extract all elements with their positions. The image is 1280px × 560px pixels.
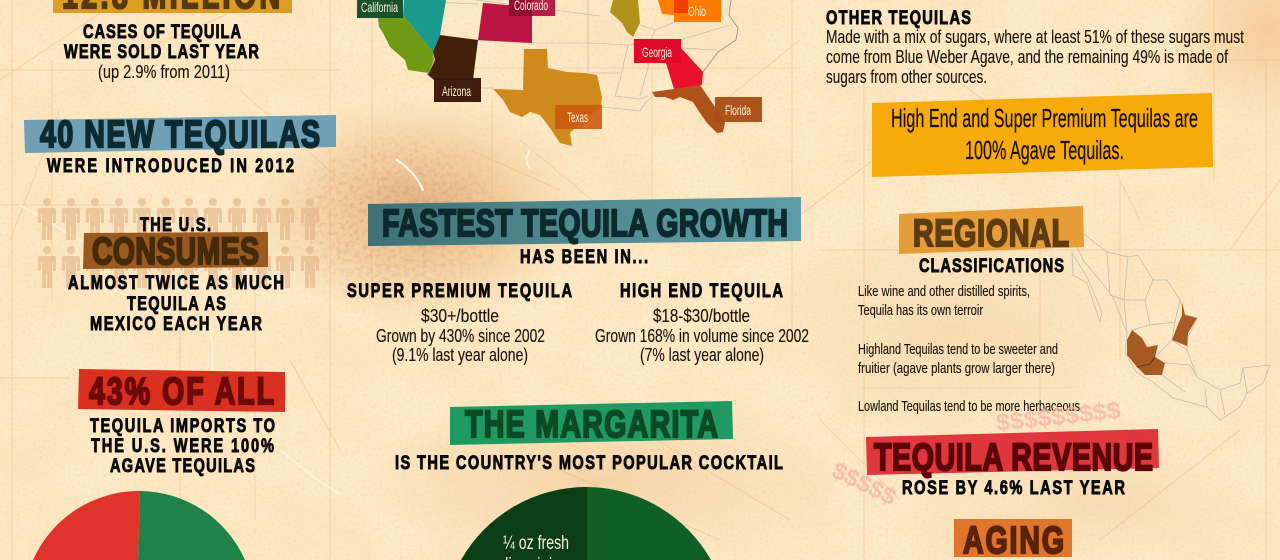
banner: 43% of all: 43% OF ALL [89,371,274,413]
text: rose by 4.6%: ROSE BY 4.6% LAST YEAR [902,476,1125,499]
icon: rows of people [38,198,319,288]
state: Florida [652,85,725,133]
text: cases of tequila [64,20,259,82]
text: tequila imports: AGAVE TEQUILAS [110,454,255,477]
text: terroir notes: Like wine and other distilled spirits, [858,284,1030,300]
label: Ohio: Ohio [688,3,706,19]
label: Ohio [674,0,721,22]
text: tequila imports [90,414,275,477]
column: high end tequila: Grown 168% in volume since 2002 [595,326,809,346]
text: other tequilas description: sugars from other sources. [826,67,987,87]
banner: regional: REGIONAL [913,213,1069,255]
column: super premium tequila: SUPER PREMIUM TEQUILA [347,279,572,302]
section: regional classifications [858,206,1270,420]
text: the u.s.: THE U.S. [140,213,211,236]
pie chart: margarita recipe [461,487,711,560]
banner: 40 new tequilas: 40 NEW TEQUILAS [40,114,320,156]
column: super premium tequila: Grown by 430% since 2002 [376,326,545,346]
column: super premium tequila: (9.1% last year alone) [392,345,528,365]
heading: other tequilas: OTHER TEQUILAS [826,6,971,29]
callout: 100% agave: 100% Agave Tequilas. [965,135,1124,165]
text: has been in: HAS BEEN IN... [520,245,648,268]
state: Illinois [610,0,640,37]
label: Georgia [634,39,681,63]
map: United States tequila states [357,0,762,146]
section: the margarita [395,401,783,560]
label: Florida: Florida [725,102,751,118]
icon: dollar signs [827,397,1123,511]
banner: fastest tequila growth: FASTEST TEQUILA GROWTH [382,203,788,245]
icon: dollar signs: $$$$$ [827,457,901,511]
label: Texas [555,105,602,129]
column: high end tequila: (7% last year alone) [640,345,764,365]
text: other tequilas description [826,27,1244,87]
text: terroir notes: Lowland Tequilas tend to be more herbaceous [858,399,1080,415]
text: cases of tequila: WERE SOLD LAST YEAR [64,40,259,63]
text: terroir notes: fruitier (agave plants grow larger there) [858,361,1055,377]
text: cases of tequila: (up 2.9% from 2011) [98,62,230,82]
text: tequila imports: TEQUILA IMPORTS TO [90,414,275,437]
label: California [357,0,403,18]
text: almost twice as much [68,271,284,335]
map: Mexico [1070,232,1270,420]
text: introduced in 2012: WERE INTRODUCED IN 2012 [47,154,294,177]
column: super premium tequila [347,279,572,365]
label: Colorado [509,0,555,16]
column: high end tequila [595,279,809,365]
section: other tequilas [826,6,1244,177]
state: Colorado [478,3,532,43]
text: terroir notes [858,284,1080,415]
section: fastest tequila growth [347,197,809,365]
state: Arizona [427,35,478,80]
section: tequila revenue [827,397,1159,560]
label: Georgia: Georgia [642,44,672,60]
state: Georgia [666,48,703,89]
column: left statistics [24,0,336,560]
banner: consumes: CONSUMES [92,231,259,273]
state: California [378,15,434,73]
label: Arizona [434,78,481,102]
text: almost twice as much: TEQUILA AS [127,292,226,315]
text: almost twice as much: MEXICO EACH YEAR [90,312,262,335]
text: most popular cocktail: IS THE COUNTRY'S MOST POPULAR COCKTAIL [395,451,783,474]
column: super premium tequila: $30+/bottle [421,306,499,326]
label: Florida [715,97,762,122]
heading: classifications: CLASSIFICATIONS [919,254,1064,277]
banner: the margarita: THE MARGARITA [465,404,718,446]
text: terroir notes: Highland Tequilas tend to be sweeter and [858,342,1058,358]
text: terroir notes: Tequila has its own terroir [858,303,983,319]
state: Texas [493,49,602,146]
callout: 100% agave [872,93,1213,177]
text: tequila imports: THE U.S. WERE 100% [91,434,274,457]
state: Indiana [658,0,674,15]
state: Nevada [403,0,446,52]
column: high end tequila: $18-$30/bottle [653,306,750,326]
icon: dollar signs: $$$$$$$$$ [995,397,1123,437]
label: Arizona: Arizona [442,83,471,99]
text: almost twice as much: ALMOST TWICE AS MUCH [68,271,284,294]
banner: tequila revenue: TEQUILA REVENUE [874,437,1153,479]
text: cases of tequila: CASES OF TEQUILA [83,20,241,43]
map outlines [385,0,738,111]
pie chart: margarita recipe: ¼ oz fresh [503,533,569,554]
label: Texas: Texas [567,109,588,125]
pie chart: agave imports [33,491,245,560]
column: high end tequila: HIGH END TEQUILA [620,279,783,302]
